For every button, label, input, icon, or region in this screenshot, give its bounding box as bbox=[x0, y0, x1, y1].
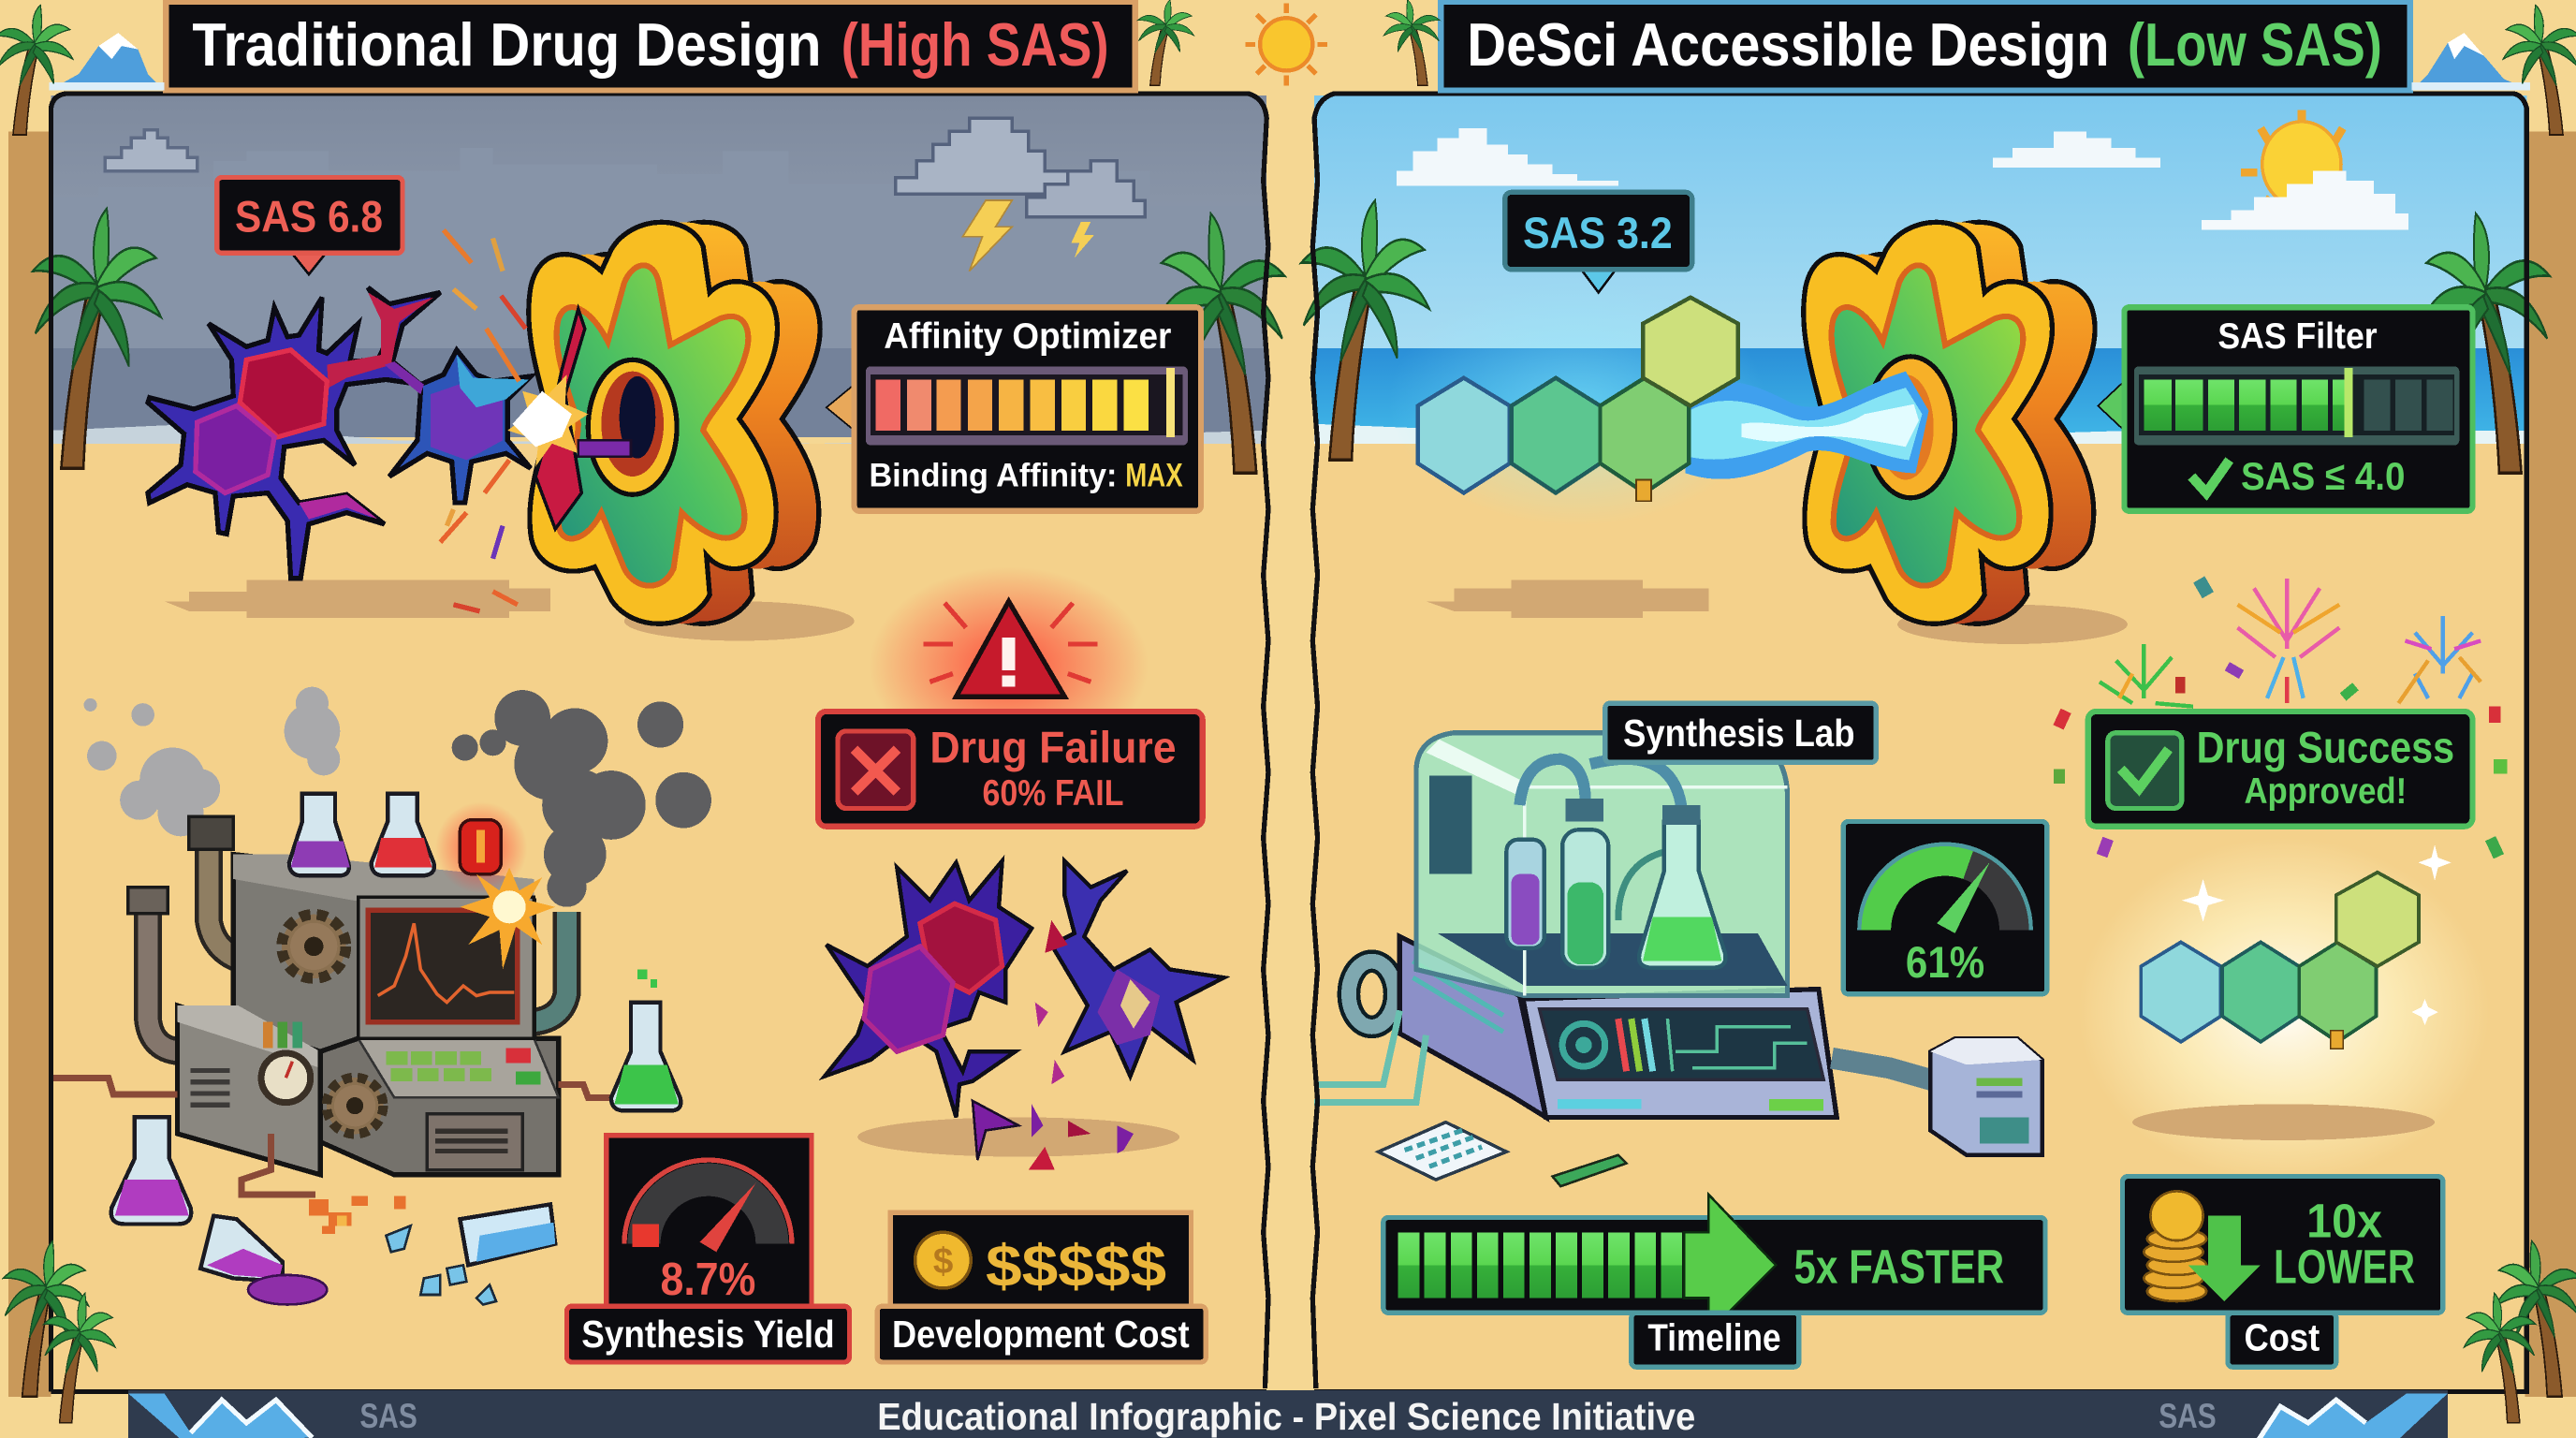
cable to server bbox=[1832, 1058, 1936, 1081]
server tower bbox=[1930, 1038, 2042, 1155]
icon: top sun bbox=[1245, 4, 1327, 85]
ground shadow under receptor bbox=[624, 601, 855, 640]
gears bbox=[282, 915, 345, 978]
success molecule bbox=[2141, 873, 2419, 1049]
side hose ring inner bbox=[1349, 961, 1395, 1027]
blue ring highlight bbox=[457, 355, 529, 407]
confetti bbox=[2053, 576, 2507, 858]
left cloud small bbox=[105, 130, 198, 171]
test tube purple bbox=[1506, 840, 1544, 948]
footer bar bbox=[128, 1390, 2448, 1438]
yield gauge 61 percent bbox=[1843, 822, 2047, 994]
storm cloud large bbox=[896, 118, 1068, 194]
footer SAS left: SAS bbox=[359, 1397, 417, 1435]
right blue sky bbox=[1314, 95, 2526, 359]
yield value: 8.7% bbox=[661, 1255, 755, 1305]
tubing at base bbox=[1314, 1010, 1426, 1103]
title: desci: DeSci Accessible Design bbox=[1467, 10, 2110, 79]
receptor binding ring left bbox=[588, 360, 677, 494]
affinity bar bbox=[866, 366, 1188, 446]
left haze clouds bbox=[51, 148, 1266, 353]
panel: desci accessible design bbox=[1301, 95, 2550, 1392]
SAS threshold: SAS ≤ 4.0 bbox=[2241, 454, 2405, 498]
notepad bbox=[1379, 1123, 1506, 1180]
icon: down arrow bbox=[2188, 1216, 2261, 1301]
dial bbox=[261, 1053, 311, 1103]
cost label: Development Cost bbox=[892, 1313, 1190, 1356]
icon: palm bottom right bbox=[2496, 1240, 2576, 1397]
title: traditional: Traditional Drug Design bbox=[192, 10, 822, 79]
failure heading: Drug Failure bbox=[929, 723, 1177, 772]
upper block bbox=[233, 855, 534, 1134]
icon: palm top right bbox=[2503, 5, 2576, 135]
icon: palm top centre right bbox=[1383, 0, 1440, 85]
icon: check bbox=[2191, 460, 2230, 493]
timeline bar bbox=[1383, 1195, 2045, 1332]
SAS 3.2 callout: SAS 3.2 bbox=[1523, 209, 1673, 258]
dome stage bbox=[1438, 933, 1788, 986]
branch bbox=[327, 292, 433, 388]
synthesis lab label bbox=[1605, 703, 1876, 762]
icon: failure x bbox=[838, 731, 914, 808]
drug success box bbox=[2088, 712, 2472, 827]
SAS filter panel bbox=[2098, 307, 2472, 511]
spikes bbox=[148, 287, 440, 579]
timeline label: Timeline bbox=[1647, 1316, 1781, 1359]
monitor bbox=[359, 897, 534, 1038]
lightning bolt large bbox=[962, 200, 1012, 271]
filter heading: SAS Filter bbox=[2217, 316, 2378, 357]
SAS 6.8 callout bbox=[217, 178, 402, 274]
base stripes bbox=[1412, 961, 1503, 1032]
palm right panel right bbox=[2422, 213, 2550, 473]
yield label: Synthesis Yield bbox=[581, 1313, 835, 1356]
icon: palm bottom left bbox=[4, 1240, 89, 1397]
gauge value: 61% bbox=[1906, 938, 1984, 988]
purple flask on machine bbox=[289, 794, 350, 875]
dome front plane bbox=[1525, 787, 1788, 996]
dome inner monitor bbox=[1429, 775, 1472, 874]
synthesis lab device bbox=[1314, 733, 1837, 1117]
broken synthesis machine bbox=[128, 816, 567, 1175]
dollar signs: $$$$$ bbox=[986, 1234, 1166, 1299]
right blue sea bbox=[1314, 348, 2526, 433]
white cloud left bbox=[1397, 128, 1618, 185]
shadow under accessible receptor bbox=[1897, 605, 2128, 644]
lightning bolt small bbox=[1071, 222, 1094, 258]
warning triangle bbox=[923, 601, 1097, 697]
red ring bbox=[240, 350, 327, 437]
icon: coin: $ bbox=[933, 1241, 953, 1282]
molecule glow bbox=[1388, 279, 1766, 526]
orange debris bbox=[309, 1196, 406, 1234]
lab base side bbox=[1399, 936, 1546, 1117]
max value: MAX bbox=[1125, 457, 1183, 493]
receptor opening right bbox=[1866, 357, 1955, 498]
palm right panel left bbox=[1301, 200, 1429, 460]
icon: footer wave left bbox=[128, 1393, 312, 1438]
affinity optimizer panel bbox=[827, 307, 1201, 511]
10x text: 10x bbox=[2306, 1195, 2382, 1248]
cost label right bbox=[2228, 1313, 2336, 1367]
wires bbox=[52, 1078, 611, 1195]
approved text: Approved! bbox=[2244, 771, 2407, 812]
right sand bbox=[1314, 444, 2526, 1392]
left tan border strip bbox=[8, 131, 51, 1397]
dome highlight bbox=[1426, 740, 1531, 795]
shattered molecule bbox=[825, 861, 1224, 1170]
glass flask bbox=[1639, 805, 1725, 968]
printer slot bbox=[427, 1114, 522, 1170]
alarm light bbox=[435, 801, 527, 894]
spiky failing molecule bbox=[148, 287, 531, 579]
banner: traditional bbox=[166, 2, 1135, 91]
drug failure box bbox=[818, 712, 1203, 827]
synthesis lab label: Synthesis Lab bbox=[1623, 712, 1855, 755]
warning glow bbox=[869, 566, 1149, 764]
shadow under success molecule bbox=[2132, 1104, 2435, 1140]
palm left bbox=[33, 209, 161, 468]
icon: palm bottom left small bbox=[44, 1293, 115, 1423]
side hose ring bbox=[1349, 961, 1395, 1027]
palm right bbox=[1157, 213, 1284, 473]
SAS 3.2 callout bbox=[1505, 192, 1692, 292]
left sand bbox=[51, 444, 1266, 1392]
left stormy sky bbox=[51, 95, 1266, 359]
keypad bbox=[386, 1051, 491, 1081]
factory smoke bbox=[84, 687, 340, 836]
yield gauge bbox=[607, 1136, 812, 1310]
icon: palm bottom right small bbox=[2464, 1293, 2536, 1423]
sparks bbox=[440, 230, 526, 611]
success glow bbox=[2078, 838, 2489, 1183]
icon: success check bbox=[2108, 733, 2182, 808]
icon: coin bbox=[915, 1232, 971, 1288]
lab tubes bbox=[1519, 759, 1682, 814]
optimizer heading: Affinity Optimizer bbox=[884, 316, 1171, 357]
storm cloud small bbox=[1027, 161, 1145, 217]
energy beam bbox=[1686, 372, 1928, 479]
purple flask on sand bbox=[111, 1117, 191, 1224]
lab screen bbox=[1540, 1009, 1823, 1079]
pen bbox=[1553, 1155, 1627, 1186]
indicators bbox=[263, 1022, 302, 1049]
development cost gauge bbox=[890, 1212, 1191, 1308]
left foam line bbox=[51, 424, 1266, 453]
footer SAS right: SAS bbox=[2159, 1397, 2217, 1435]
ground shadow under molecule bbox=[165, 580, 550, 618]
right tan border strip bbox=[2525, 131, 2576, 1397]
SAS filter bar bbox=[2134, 366, 2459, 446]
white cloud center bbox=[1993, 131, 2160, 168]
molecule link bbox=[385, 361, 424, 394]
tipped flask bbox=[200, 1216, 327, 1304]
lower branch bbox=[299, 494, 378, 520]
dark factory smoke bbox=[452, 690, 711, 907]
sun bbox=[2241, 110, 2343, 213]
icon: speed arrow bbox=[1684, 1195, 1776, 1332]
cloud over sun bbox=[2202, 171, 2408, 230]
icon: footer wave right bbox=[2259, 1393, 2448, 1438]
right foam line bbox=[1314, 424, 2526, 453]
receptor left bbox=[529, 222, 820, 624]
purple ring bbox=[196, 405, 274, 493]
footer caption: Educational Infographic - Pixel Science Initiative bbox=[877, 1395, 1695, 1438]
lower text: LOWER bbox=[2274, 1240, 2415, 1294]
blue ring bbox=[431, 381, 503, 460]
cost label right: Cost bbox=[2244, 1316, 2320, 1359]
panel: traditional drug design bbox=[33, 95, 1284, 1392]
shadow under accessible molecule bbox=[1426, 580, 1708, 618]
icon: wave top right bbox=[2411, 33, 2530, 91]
broken glass tube bbox=[460, 1204, 555, 1265]
cost panel bbox=[2123, 1177, 2443, 1313]
electrical explosion bbox=[460, 868, 555, 969]
green flask bbox=[611, 969, 681, 1110]
explosion core bbox=[493, 890, 526, 923]
icon: palm top left bbox=[0, 5, 73, 135]
left grey sea bbox=[51, 348, 1266, 437]
lab base front bbox=[1523, 990, 1837, 1117]
failure rate: 60% FAIL bbox=[983, 773, 1123, 814]
left cabinet bbox=[178, 1005, 320, 1175]
icon: wave top left bbox=[50, 33, 165, 91]
receptor right bbox=[1804, 222, 2095, 624]
sparkles bbox=[2182, 844, 2452, 1025]
collision explosion bbox=[507, 309, 631, 529]
fireworks bbox=[2100, 579, 2481, 707]
front console bbox=[320, 1038, 559, 1175]
low SAS molecule bbox=[1418, 298, 1738, 501]
icon: coin stack bbox=[2144, 1191, 2206, 1301]
banner: desci bbox=[1441, 2, 2410, 91]
red flask on machine bbox=[372, 794, 434, 875]
title: high SAS: (High SAS) bbox=[842, 10, 1109, 79]
icon: palm top centre left bbox=[1137, 0, 1194, 85]
success heading: Drug Success bbox=[2197, 723, 2454, 772]
glass shards bbox=[386, 1225, 496, 1304]
pipes bbox=[148, 829, 567, 1051]
blue ring spikes bbox=[389, 350, 531, 503]
title: low SAS: (Low SAS) bbox=[2128, 10, 2382, 79]
test tube green bbox=[1562, 799, 1608, 968]
binding affinity text: Binding Affinity: bbox=[869, 457, 1117, 493]
glass dome bbox=[1416, 733, 1788, 996]
SAS 6.8 callout: SAS 6.8 bbox=[235, 192, 383, 242]
speed text: 5x FASTER bbox=[1794, 1240, 2004, 1294]
